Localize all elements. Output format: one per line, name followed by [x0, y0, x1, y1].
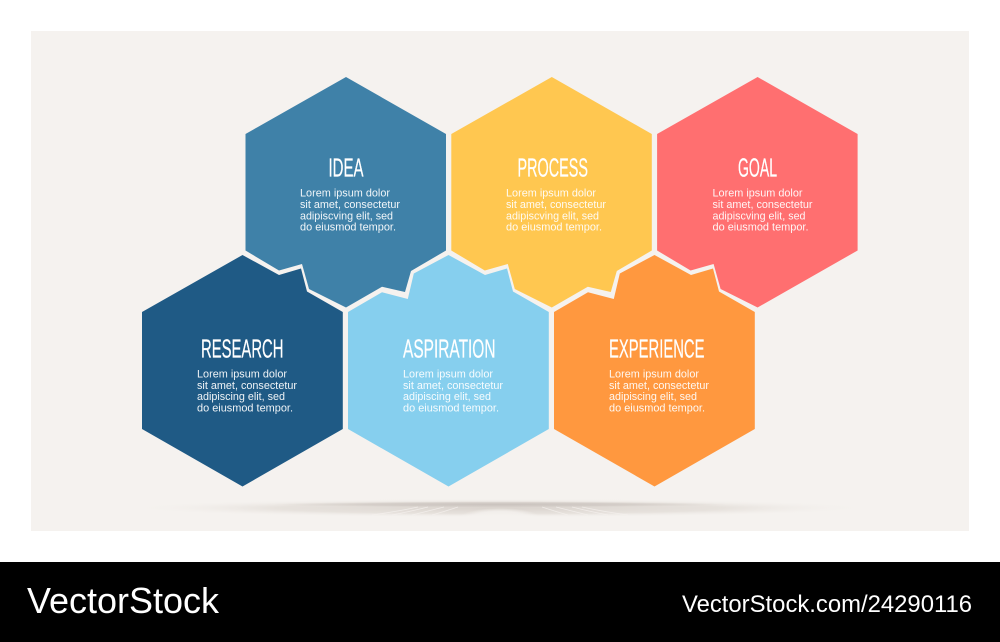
text block: goal: adipiscving elit, sed — [712, 210, 806, 222]
heading: experience: EXPERIENCE — [609, 334, 704, 364]
footer logo text: VectorStock — [27, 580, 220, 621]
panel: experience — [554, 255, 755, 486]
footer image id: VectorStock.com/24290116 — [682, 591, 972, 618]
text block: idea — [300, 188, 400, 234]
text block: research: Lorem ipsum dolor — [197, 368, 287, 380]
text block: goal — [712, 188, 813, 234]
text block: idea: adipiscving elit, sed — [300, 210, 393, 222]
text block: experience: adipiscing elit, sed — [609, 391, 697, 403]
text block: research: adipiscing elit, sed — [197, 391, 285, 403]
panel: process — [451, 77, 652, 308]
heading: goal: GOAL — [738, 152, 777, 182]
text block: aspiration: do eiusmod tempor. — [403, 402, 499, 414]
text block: research: sit amet, consectetur — [197, 380, 297, 392]
text block: goal: do eiusmod tempor. — [712, 222, 808, 234]
text block: process: adipiscving elit, sed — [506, 210, 599, 222]
heading: aspiration: ASPIRATION — [403, 334, 496, 364]
text block: research — [197, 368, 297, 414]
text block: aspiration — [403, 368, 503, 414]
panel: aspiration — [348, 255, 549, 486]
text block: aspiration: Lorem ipsum dolor — [403, 368, 493, 380]
text block: experience — [609, 368, 709, 414]
ground shadow — [128, 498, 872, 530]
text block: idea: do eiusmod tempor. — [300, 222, 396, 234]
panel: goal — [657, 77, 858, 308]
text block: goal: sit amet, consectetur — [712, 199, 813, 211]
text block: process: Lorem ipsum dolor — [506, 188, 596, 200]
text block: research: do eiusmod tempor. — [197, 402, 293, 414]
text block: idea: sit amet, consectetur — [300, 199, 400, 211]
panel: research — [142, 255, 343, 486]
heading: idea: IDEA — [328, 152, 364, 182]
panel: idea — [246, 77, 446, 308]
heading: process: PROCESS — [518, 152, 588, 182]
text block: experience: do eiusmod tempor. — [609, 402, 705, 414]
text block: experience: sit amet, consectetur — [609, 380, 709, 392]
text block: process: sit amet, consectetur — [506, 199, 606, 211]
heading: research: RESEARCH — [201, 334, 284, 364]
text block: experience: Lorem ipsum dolor — [609, 368, 699, 380]
text block: idea: Lorem ipsum dolor — [300, 188, 390, 200]
text block: process — [506, 188, 606, 234]
text block: aspiration: sit amet, consectetur — [403, 380, 503, 392]
text block: aspiration: adipiscing elit, sed — [403, 391, 491, 403]
footer band — [0, 562, 1000, 642]
background panel — [31, 31, 969, 531]
text block: goal: Lorem ipsum dolor — [712, 188, 803, 200]
text block: process: do eiusmod tempor. — [506, 222, 602, 234]
